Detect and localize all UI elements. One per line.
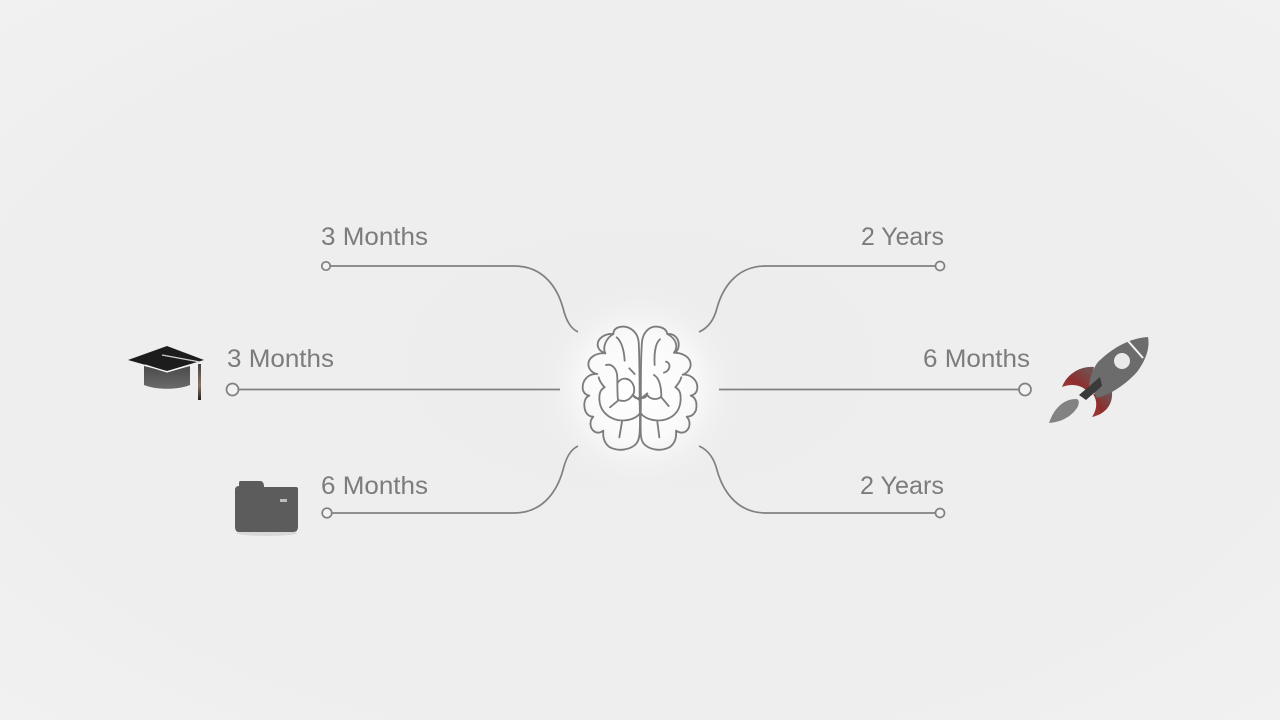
connector: middle right, 6 Months xyxy=(719,384,1031,396)
label: middle right 6 Months: 6 Months xyxy=(923,345,1030,373)
folder body xyxy=(235,481,298,532)
label: middle left 3 Months: 3 Months xyxy=(227,345,334,373)
cap base xyxy=(144,366,190,389)
icon: graduation cap xyxy=(128,346,204,400)
rocket window xyxy=(1114,353,1130,369)
rocket right fin xyxy=(1092,392,1112,417)
label: top right 2 Years: 2 Years xyxy=(861,223,944,251)
rocket stripe xyxy=(1128,341,1143,358)
connector: bottom left, 6 Months xyxy=(322,446,578,518)
brain: left inner folds xyxy=(599,334,640,437)
folder clip xyxy=(280,499,287,502)
icon: brain xyxy=(583,327,697,450)
connector: top left, 3 Months xyxy=(322,262,578,332)
brain: left hemisphere outline xyxy=(583,327,640,450)
brain: right hemisphere outline xyxy=(641,327,697,450)
rocket left fin xyxy=(1062,367,1094,392)
label: top left 3 Months: 3 Months xyxy=(321,223,428,251)
icon: rocket xyxy=(1049,337,1149,423)
label: bottom right 2 Years: 2 Years xyxy=(860,472,944,500)
rocket body xyxy=(1089,337,1149,398)
rocket nozzle xyxy=(1079,377,1102,400)
connector: bottom right, 2 Years xyxy=(699,446,944,518)
connector: top right, 2 Years xyxy=(699,262,944,332)
folder shadow xyxy=(237,530,297,536)
cap tassel xyxy=(198,364,201,400)
label: bottom left 6 Months: 6 Months xyxy=(321,472,428,500)
brain: right inner folds xyxy=(633,334,681,437)
rocket flame xyxy=(1049,399,1079,423)
cap board xyxy=(128,346,204,371)
icon: folder xyxy=(235,481,298,536)
connector: middle left, 3 Months xyxy=(226,384,560,396)
